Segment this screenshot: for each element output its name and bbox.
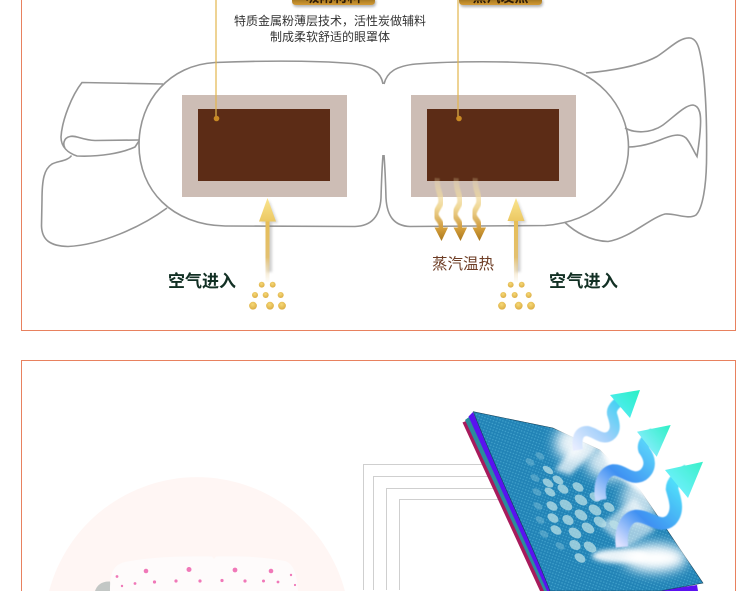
teal layer bbox=[465, 417, 552, 591]
left gold label button bbox=[292, 0, 376, 7]
vapor arrow 1 bbox=[577, 390, 640, 450]
right strap inner bbox=[625, 105, 701, 156]
faint outer hexagon holes bbox=[524, 451, 566, 551]
left absorbent pad bbox=[182, 95, 347, 197]
air inlet label right: 空气进入 bbox=[549, 271, 618, 291]
air inlet arrow right bbox=[508, 198, 526, 282]
right strap outer bbox=[565, 38, 707, 242]
panel: mask structure bbox=[22, 0, 736, 330]
left callout leader bbox=[214, 0, 219, 121]
steam wave arrows bbox=[434, 178, 486, 241]
left lobe bbox=[139, 61, 383, 226]
left strap upper bbox=[61, 82, 163, 156]
air particles right bbox=[498, 282, 535, 310]
white glow patches bbox=[555, 425, 687, 572]
layered fabric swatch bbox=[462, 412, 703, 591]
hexagon holes bbox=[541, 464, 622, 565]
dotted eye mask photo bbox=[110, 556, 298, 591]
eye mask outline bbox=[42, 38, 707, 247]
vapor arrow 3 bbox=[622, 462, 703, 547]
right heating pad bbox=[411, 95, 576, 197]
grey strap of mask photo bbox=[95, 581, 112, 591]
air particles left bbox=[249, 282, 286, 310]
pale pink circle bbox=[49, 477, 345, 591]
right gold label button bbox=[459, 0, 543, 7]
magenta layer bbox=[462, 421, 545, 591]
vapor arrow 2 bbox=[600, 425, 671, 500]
air inlet arrow left bbox=[259, 198, 278, 282]
layer callout lines bbox=[364, 464, 521, 590]
description text: 制成柔软舒适的眼罩体 bbox=[270, 29, 390, 44]
description text bbox=[234, 13, 426, 44]
purple layer bbox=[468, 412, 553, 591]
purple bottom edge bbox=[655, 585, 698, 591]
right lobe bbox=[384, 62, 628, 226]
blue mesh surface bbox=[473, 412, 703, 591]
description text: 特质金属粉薄层技术，活性炭做辅料 bbox=[234, 13, 426, 28]
panel: breathable fabric bbox=[22, 360, 736, 591]
right callout leader bbox=[456, 0, 462, 121]
left strap lower bbox=[42, 156, 167, 246]
steam label: 蒸汽温热 bbox=[432, 255, 494, 273]
air inlet label left: 空气进入 bbox=[168, 271, 236, 291]
